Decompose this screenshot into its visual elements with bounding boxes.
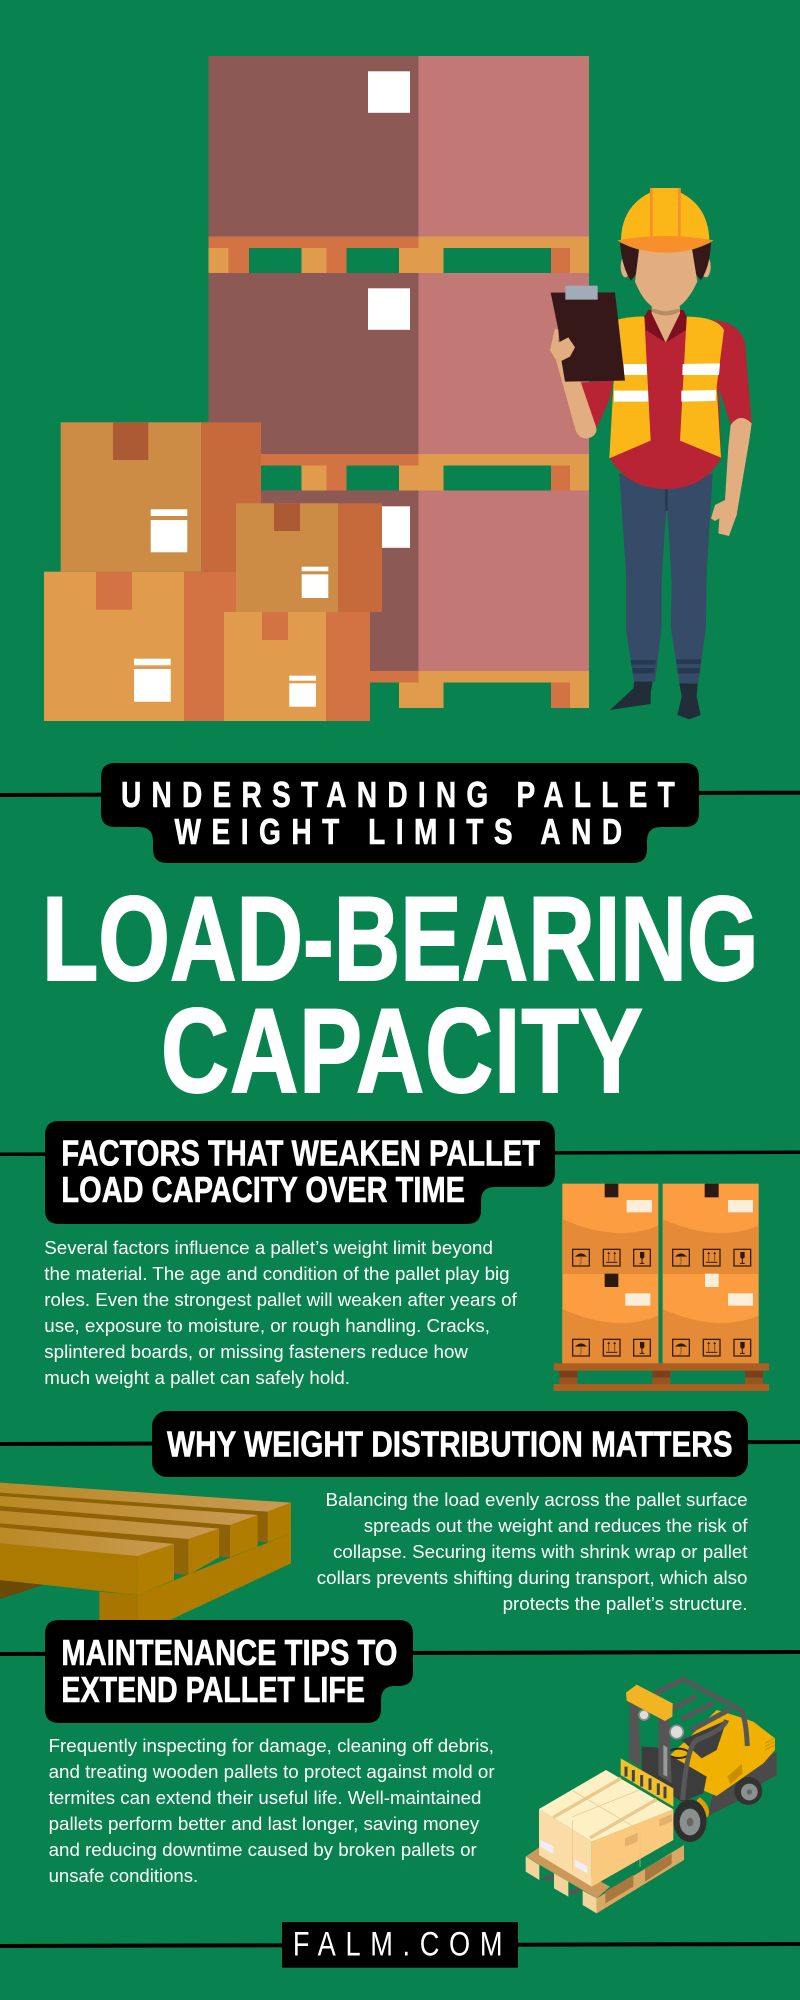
body text: weight distribution: collars prevents shifting during transport, which also (317, 1567, 748, 1588)
wooden pallet (554, 1363, 769, 1391)
rule: section 2 (0, 1440, 800, 1446)
stacked box: top (208, 56, 589, 236)
forklift: chassis (668, 1710, 777, 1817)
rule: title (0, 791, 800, 797)
slat: second (0, 1496, 258, 1557)
carton: upper right (663, 1184, 759, 1274)
body text: weight distribution: collapse. Securing items with shrink wrap or pallet (333, 1541, 748, 1562)
worker: sleeves and shirt (581, 320, 752, 489)
box: upper small (236, 503, 382, 612)
body text: maintenance: and treating wooden pallets to protect against mold or (49, 1761, 495, 1782)
main title line 2: CAPACITY (161, 983, 643, 1118)
worker: hair (620, 243, 711, 281)
worker: left arm (556, 360, 596, 438)
forklift: rear wheel (734, 1777, 762, 1805)
body text: maintenance: and reducing downtime caused by broken pallets or (49, 1839, 477, 1860)
title line 2: WEIGHT LIMITS AND (174, 812, 622, 852)
heading line 2: LOAD CAPACITY OVER TIME (61, 1169, 465, 1210)
cardboard load (539, 1770, 673, 1887)
forklift: roof cage (655, 1679, 747, 1800)
body text: maintenance (49, 1735, 495, 1886)
worker: ears (621, 256, 711, 277)
slat: far (0, 1483, 291, 1542)
body text: weight distribution: spreads out the weight and reduces the risk of (364, 1515, 748, 1536)
worker: trousers (619, 473, 713, 683)
body text: factors: much weight a pallet can safely hold. (44, 1367, 350, 1388)
illustration: cardboard boxes pile (44, 422, 382, 721)
title line 1: UNDERSTANDING PALLET (121, 775, 675, 815)
stacked box: bottom (208, 490, 589, 671)
heading badge (45, 1620, 413, 1723)
body text: factors: splintered boards, or missing fasteners reduce how (44, 1341, 469, 1362)
illustration: warehouse worker with clipboard (550, 188, 752, 719)
pallet: bottom (208, 671, 589, 708)
body text: maintenance: pallets perform better and last longer, saving money (49, 1813, 480, 1834)
worker: right arm and hand (711, 418, 752, 536)
rule: section 1 (0, 1150, 800, 1156)
heading line 2: EXTEND PALLET LIFE (61, 1669, 365, 1710)
body text: maintenance: Frequently inspecting for damage, cleaning off debris, (49, 1735, 494, 1756)
slat: third (0, 1511, 219, 1575)
body text: factors: the material. The age and condition of the pallet play big (44, 1263, 510, 1284)
pallet under load (526, 1845, 684, 1913)
rule: section 3 (0, 1650, 800, 1656)
footer badge: falm.com (282, 1922, 518, 1968)
body text: factors: roles. Even the strongest pallet will weaken after years of (44, 1289, 518, 1310)
stacked box: middle (208, 273, 589, 454)
illustration: close-up wooden pallet corner (0, 1483, 291, 1620)
title badge: understanding pallet weight limits and (101, 763, 699, 863)
body text: weight distribution: protects the pallet’s structure. (503, 1593, 748, 1614)
forklift: seat and cab (642, 1720, 727, 1802)
body text: weight distribution (317, 1489, 748, 1614)
forklift: fork carriage (621, 1758, 673, 1807)
body text: factors (44, 1237, 518, 1388)
carton: lower left (562, 1274, 658, 1363)
illustration: stacked pallets of large boxes (208, 56, 589, 708)
worker: hard hat (617, 188, 714, 253)
illustration: isometric forklift with pallet load (526, 1679, 777, 1913)
forklift: overhead yellow bar (626, 1685, 673, 1721)
body text: maintenance: unsafe conditions. (49, 1865, 198, 1886)
badge shape (101, 763, 699, 863)
forklift: front wheel (673, 1797, 709, 1842)
pallet: middle (208, 454, 589, 490)
box: lower large (44, 572, 236, 721)
heading badge (45, 1121, 555, 1224)
footer box (282, 1922, 518, 1968)
pallet: upper (208, 236, 589, 273)
box: upper large (61, 422, 261, 572)
rule: footer (0, 1942, 800, 1948)
main title line 1: LOAD-BEARING (42, 871, 759, 1006)
pallet underside shadow (0, 1580, 43, 1599)
heading line 1: MAINTENANCE TIPS TO (61, 1632, 397, 1673)
worker: collar and neck (644, 307, 687, 343)
illustration: four labelled cartons on a pallet (554, 1184, 769, 1391)
heading: factors that weaken pallet load capacity over time (45, 1121, 555, 1224)
box: lower small (224, 612, 370, 721)
body text: factors: use, exposure to moisture, or rough handling. Cracks, (44, 1315, 490, 1336)
body text: weight distribution: Balancing the load evenly across the pallet surface (326, 1489, 748, 1510)
forklift: mast (629, 1698, 672, 1783)
worker: hand holding clipboard (550, 328, 575, 362)
worker: clipboard (551, 286, 625, 382)
body text: factors: Several factors influence a pallet’s weight limit beyond (44, 1237, 493, 1258)
carton: upper left (562, 1184, 658, 1274)
heading line 1: FACTORS THAT WEAKEN PALLET (61, 1132, 540, 1173)
body text: maintenance: termites can extend their useful life. Well-maintained (49, 1787, 481, 1808)
forklift: headlights (639, 1710, 683, 1739)
worker: face (635, 247, 697, 311)
carton: lower right (663, 1274, 759, 1363)
heading: why weight distribution matters (152, 1411, 748, 1477)
heading: maintenance tips to extend pallet life (45, 1620, 413, 1723)
worker: safety vest (609, 317, 724, 458)
pallet cross beam (99, 1533, 291, 1620)
heading badge (152, 1411, 748, 1477)
slat: near (0, 1527, 174, 1595)
footer text: FALM.COM (293, 1925, 502, 1963)
worker: shoes (610, 682, 701, 719)
